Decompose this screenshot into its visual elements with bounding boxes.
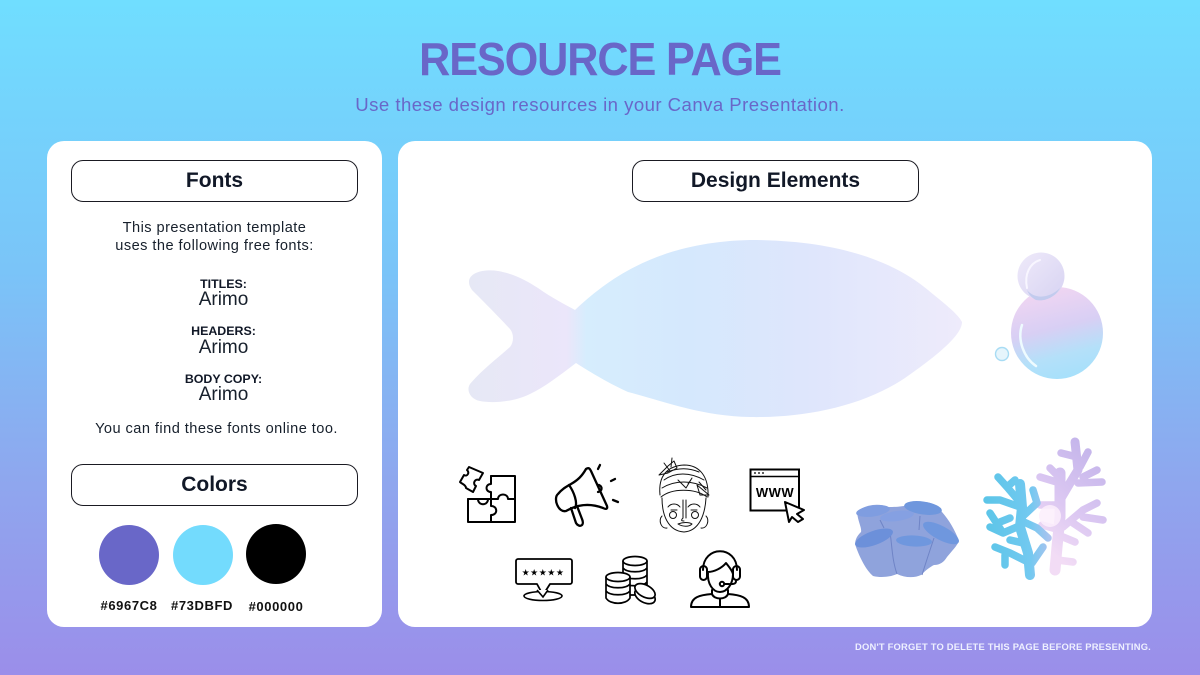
label: body copy font: BODY COPY:	[185, 372, 262, 386]
heading: design elements	[632, 160, 919, 202]
panel: fonts and colors	[47, 141, 382, 627]
color label: sky blue: #73DBFD	[171, 598, 233, 613]
illustration: watercolor fish	[468, 240, 962, 417]
panel: design elements	[398, 141, 1152, 627]
illustration: branch coral	[987, 442, 1103, 575]
icon: coin stacks	[606, 556, 658, 607]
illustration: tube coral	[853, 499, 962, 577]
text block: font intro: This presentation template	[123, 220, 306, 236]
heading: colors: Colors	[181, 473, 248, 496]
text block: font intro: uses the following free fonts:	[115, 238, 314, 254]
color label: purple: #6967C8	[101, 598, 157, 613]
label: titles font: TITLES:	[200, 277, 247, 291]
icon: star review: ★★★★★	[522, 568, 564, 578]
heading: design elements: Design Elements	[691, 169, 860, 192]
icon: website browser: WWW	[756, 485, 794, 500]
icon: megaphone	[556, 465, 618, 526]
color swatch: sky blue	[173, 525, 233, 585]
icon: woman with turban	[659, 458, 709, 532]
color swatch: purple	[99, 525, 159, 585]
font name: headers: Arimo	[199, 337, 248, 358]
text block: fonts note: You can find these fonts online too.	[95, 421, 338, 437]
icon: website browser	[750, 470, 804, 522]
icon: puzzle	[460, 467, 515, 522]
footer note: DON'T FORGET TO DELETE THIS PAGE BEFORE PRESENTING.	[855, 641, 1151, 652]
font name: titles: Arimo	[199, 289, 248, 310]
label: headers font: HEADERS:	[191, 324, 256, 338]
color swatch: black	[246, 524, 306, 584]
icon: support agent	[691, 551, 749, 607]
text block: font intro	[115, 220, 314, 254]
color label: black: #000000	[249, 599, 303, 614]
font name: body copy: Arimo	[199, 384, 248, 405]
title: RESOURCE PAGE	[419, 33, 781, 85]
heading: colors	[71, 464, 358, 506]
icon: star review	[516, 559, 572, 600]
heading: fonts	[71, 160, 358, 202]
heading: fonts: Fonts	[186, 169, 243, 192]
subtitle: Use these design resources in your Canva Presentation.	[355, 94, 845, 115]
illustration: bubbles	[996, 252, 1103, 379]
